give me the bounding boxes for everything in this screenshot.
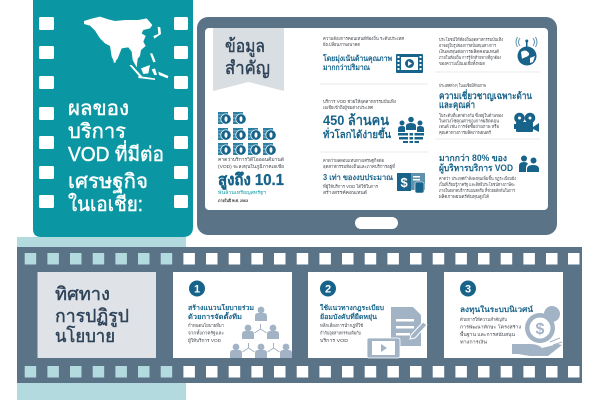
title text: VOD ที่มีต่อ xyxy=(68,140,164,166)
block: more than 80 percent: ภายในตลาดบริการแบบสตรีม ที่ช่วยผลักดันในการ xyxy=(439,187,515,193)
stat: market value: สูงถึง 10.1 xyxy=(218,171,284,191)
panel: step 1: จากทั้งภาครัฐและ xyxy=(188,330,225,336)
icon: hand holding money: $ xyxy=(536,321,545,338)
block: local investment: ของความเป็นเอเชียทั้งหมด xyxy=(439,59,485,66)
block: more than 80 percent: เป็นที่เรียนรู้ภาครัฐ และสิทธิประโยชน์ทางภาษีจะ xyxy=(439,180,515,188)
block: three times the budget: คาดว่าผลตอบแทนทางเศรษฐกิจต่อ xyxy=(323,158,384,164)
panel: policy reform heading xyxy=(38,272,156,358)
block: expertise and value: คุณค่าทางการผลิตภาพยนตร์ xyxy=(439,129,491,136)
block: expertise and value: เทนต์ เช่น การจัดซื้อถ่ายภาพ หรือ xyxy=(439,123,499,129)
panel: step 3: 3 xyxy=(465,284,471,296)
title text: ผลของ xyxy=(68,98,129,120)
panel: step 2: หลีกเลี่ยงการนำกฎที่ใช้ xyxy=(320,322,363,328)
panel: step 3: ด้วยการให้ความสำคัญกับ xyxy=(460,316,507,323)
panel: step 3: ลงทุนในระบบนิเวศน์ xyxy=(460,305,534,314)
block: three times the budget xyxy=(323,158,395,195)
stat: market value: พันล้านเหรียญสหรัฐฯ xyxy=(218,189,266,196)
panel: step 1: ผู้ให้บริการ VOD xyxy=(188,338,222,344)
block: local investment: เงินลงทุนต่อการผลิตคอนเทนต์ xyxy=(439,48,499,55)
panel: step 1: กำหนดนโยบายที่มา xyxy=(188,322,224,328)
block: local investment: อาจอยู่ในรูปของการสนับสนุนทางการ xyxy=(439,42,496,49)
panel: policy reform heading: การปฏิรูป xyxy=(55,306,129,327)
icon: budget documents and coins xyxy=(397,173,425,193)
block: expertise and value: และคุณค่า xyxy=(439,100,475,111)
panel: step 2: กำกับอุตสาหกรรมเดิมกับ xyxy=(320,330,361,336)
icon: people on globe xyxy=(398,117,424,144)
key info banner: สำคัญ xyxy=(225,58,270,78)
panel: step 1 xyxy=(173,272,292,358)
panel: step 3 xyxy=(444,272,563,358)
key info banner xyxy=(213,28,284,91)
block: 450 million people: ทั่วโลกได้ง่ายขึ้น xyxy=(323,127,391,141)
title text: บริการ xyxy=(68,121,126,143)
block: quality over quantity: มากกว่าปริมาณ xyxy=(323,63,370,72)
stat: market value: คาดว่าบริการวิดีโอออนดีมานด์ xyxy=(218,156,284,162)
icon: broadcast globe xyxy=(516,37,537,66)
key info banner: ข้อมูล xyxy=(225,36,265,57)
icon: document and tablet xyxy=(367,307,427,358)
light teal backing strip xyxy=(17,237,186,400)
block: more than 80 percent: ผู้บริหารบริการ VOD xyxy=(439,163,513,174)
panel: step 3: การพัฒนาทักษะ โครงสร้าง xyxy=(460,324,521,330)
block: 450 million people: บริการ VOD ช่วยให้อุตสาหกรรมบันเทิง xyxy=(323,98,396,105)
block: three times the budget: 3 เท่า ของงบประมาณ xyxy=(323,173,394,182)
icon: film frame with play xyxy=(396,54,423,73)
block: expertise and value: ในระดับที่แตกต่างกัน ซึ่งอยู่ในด้านของ xyxy=(439,112,503,119)
icon: movie camera xyxy=(514,113,539,132)
panel: step 2 xyxy=(308,272,427,358)
panel: step 3: พื้นฐาน และการสนับสนุน xyxy=(460,331,516,338)
block: quality over quantity xyxy=(322,35,404,72)
panel: teal film strip title xyxy=(33,0,193,237)
block: expertise and value: ประเทศต่างๆ ในเอเชียมีศักยภาพ xyxy=(439,82,486,88)
block: 450 million people: 450 ล้านคน xyxy=(323,112,389,128)
panel: step 2: บริการ VOD xyxy=(320,338,349,343)
block: three times the budget: ที่ผู้ให้บริการ VOD ได้ใช้ในการ xyxy=(323,183,378,190)
block: expertise and value: ในห่วงโซ่คุณค่าของการผลิตคอน xyxy=(439,118,500,124)
icon: team pyramid xyxy=(230,307,292,358)
block: expertise and value: ความเชี่ยวชาญเฉพาะด้าน xyxy=(439,88,532,102)
block: three times the budget: สร้างสรรค์คอนเทนต์ xyxy=(323,189,367,195)
panel: step 3: ทางการเงิน xyxy=(460,340,488,344)
block: more than 80 percent: คาดว่า ประเทศกำลังลงทุนเพิ่มขึ้น กฎระเบียบยัง xyxy=(439,175,516,182)
block: 450 million people xyxy=(323,98,396,141)
block: quality over quantity: โดยมุ่งเน้นด้านคุณภาพ xyxy=(322,53,392,63)
block: expertise and value xyxy=(439,82,532,136)
block: local investment: ประโยชน์ให้ท้องถิ่นอุตสาหกรรมบันเทิง xyxy=(439,36,503,43)
title text xyxy=(68,98,164,216)
stat: market value: ภายในปี พ.ศ. 2563 xyxy=(218,197,249,203)
block: local investment: ภายในท้องถิ่น การรู้จักท้ายทางที่ถูกต้อง xyxy=(439,54,501,61)
panel: step 2: 2 xyxy=(325,284,331,296)
block: more than 80 percent: ผลิตภาพยนตร์ต้นทุนสูงได้ xyxy=(439,193,489,200)
stat: market value xyxy=(218,156,284,203)
title text: ในเอเชีย: xyxy=(68,193,143,216)
block: 450 million people: เอเชียเข้าถึงผู้ชมต่างประเทศ xyxy=(323,104,373,111)
block: quality over quantity: ยังเปลี่ยนภาพอนาคต xyxy=(323,41,360,47)
panel: policy reform heading: ทิศทาง xyxy=(55,284,110,304)
icon: coin stacks xyxy=(218,112,276,155)
block: local investment xyxy=(439,36,503,66)
block: quality over quantity: ความต้องการคอนเทนต์ท้องถิ่น ระดับประเทศ xyxy=(323,35,404,41)
panel: policy reform heading: นโยบาย xyxy=(55,325,115,346)
icon: executives xyxy=(519,156,539,172)
stat: market value: (VOD) จะลงทุนในภูมิภาคเอเชีย xyxy=(218,163,284,170)
panel: step 1: 1 xyxy=(194,284,200,296)
panel: step 2: ย้อมบังคับที่ยืดหยุ่น xyxy=(320,311,378,321)
panel: step 1: สร้างแนวนโยบายร่วม xyxy=(188,303,254,312)
icon: map of Asia xyxy=(84,17,168,80)
block: more than 80 percent xyxy=(439,153,516,200)
panel: monitor xyxy=(197,17,557,235)
title text: เศรษฐกิจ xyxy=(68,171,148,193)
block: three times the budget: อุตสาหกรรมท้องถิ่นและภาคบริการอยู่ที่ xyxy=(323,163,395,170)
icon: budget documents and coins: $ xyxy=(400,175,408,190)
panel: film strip policy reform xyxy=(17,247,582,383)
panel: step 2: ใช้แนวทางกฎระเบียบ xyxy=(320,303,384,312)
panel: step 1: ด้วยการจัดตั้งทีม xyxy=(188,311,242,321)
block: more than 80 percent: มากกว่า 80% ของ xyxy=(439,153,507,163)
